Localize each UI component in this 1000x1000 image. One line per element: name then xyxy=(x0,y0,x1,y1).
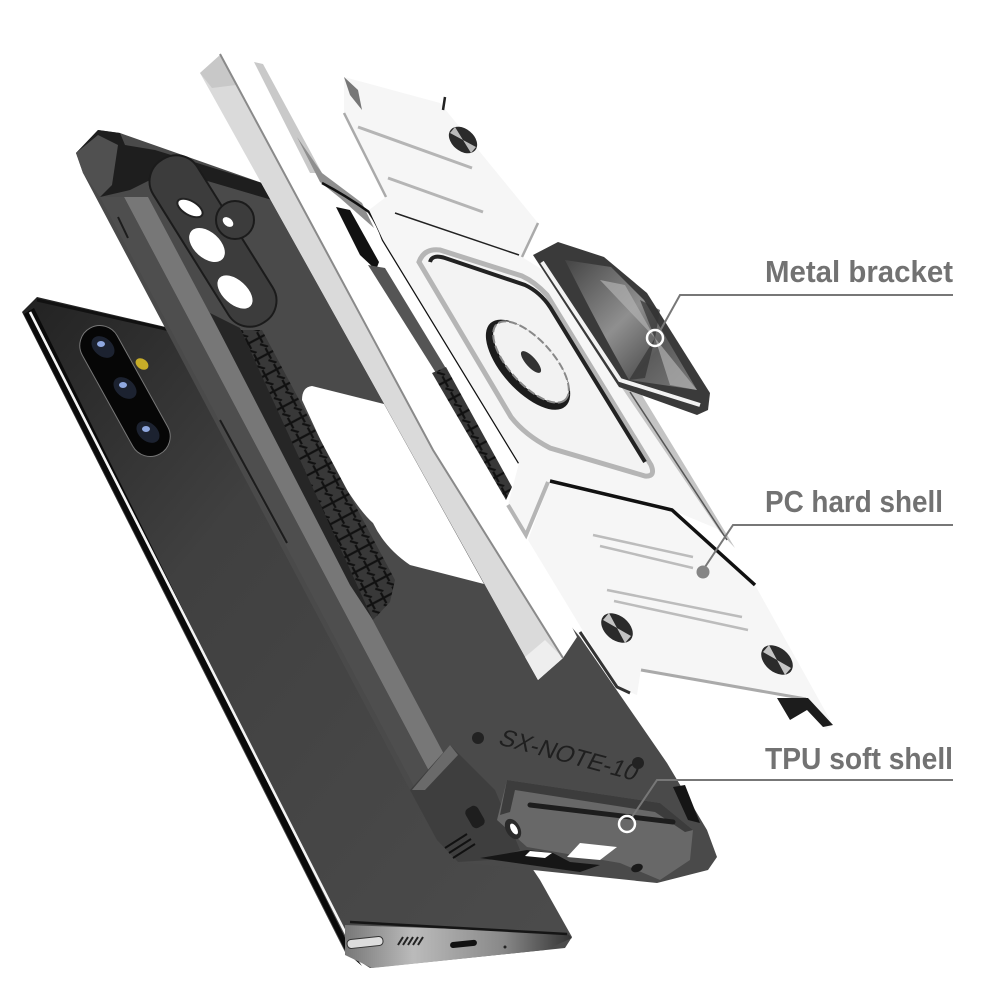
embossed model text: SX-NOTE-10 xyxy=(494,725,644,786)
callout: PC hard shell xyxy=(696,484,953,578)
case light strip xyxy=(124,197,463,790)
bottom corner bumper xyxy=(410,745,520,862)
phone bottom edge xyxy=(345,922,572,968)
lower plate xyxy=(508,481,833,730)
screw xyxy=(444,121,482,159)
screw xyxy=(755,639,799,681)
callout: Metal bracket xyxy=(647,254,953,346)
callout: TPU soft shell xyxy=(619,741,953,832)
grip tread xyxy=(240,330,395,620)
PC hard shell side rail xyxy=(200,52,577,680)
callout: Metal bracket: Metal bracket xyxy=(765,254,953,289)
phone edge highlight xyxy=(24,308,362,966)
ring holder xyxy=(533,242,710,415)
right rail xyxy=(622,388,735,548)
side opening xyxy=(336,207,512,500)
camera module xyxy=(73,318,177,464)
camera cut-out frame xyxy=(140,146,286,336)
phone xyxy=(22,297,572,968)
screw xyxy=(595,607,639,649)
central recessed panel xyxy=(419,250,653,476)
gear mount xyxy=(471,306,585,424)
callout: TPU soft shell: TPU soft shell xyxy=(765,741,953,776)
upper plate xyxy=(344,77,720,535)
bottom port panel xyxy=(480,780,700,880)
callout: PC hard shell: PC hard shell xyxy=(765,484,943,519)
TPU soft shell xyxy=(76,130,717,883)
white cut-out xyxy=(302,386,484,584)
